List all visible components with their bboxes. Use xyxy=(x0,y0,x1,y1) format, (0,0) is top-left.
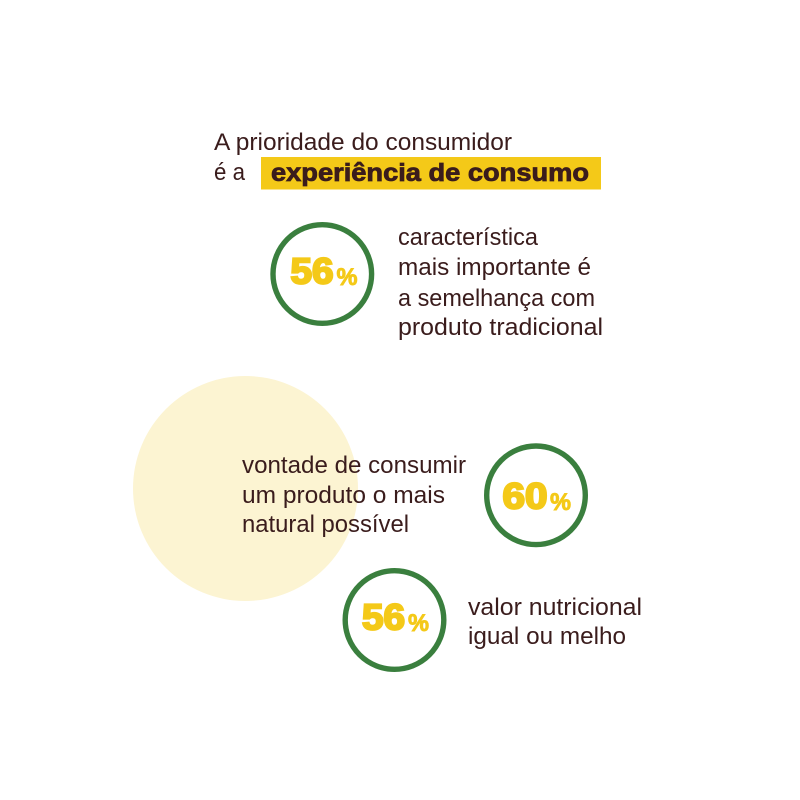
stat 2: 60% natural xyxy=(242,446,585,545)
title: é a xyxy=(214,159,246,186)
stat 1: 56% characteristic: 56 xyxy=(290,250,334,292)
stat 2: 60% natural: um produto o mais xyxy=(242,482,445,509)
stat 1: 56% characteristic: característica xyxy=(398,224,539,251)
title: experiência de consumo xyxy=(271,159,589,187)
stat 2: 60% natural: % xyxy=(550,489,571,516)
decorative pale yellow circle xyxy=(133,376,358,601)
stat 3: 56% nutritional value xyxy=(345,571,642,669)
stat 1: 56% characteristic xyxy=(273,224,603,341)
stat 3: 56% nutritional value: valor nutricional xyxy=(468,594,642,621)
title: A prioridade do consumidor xyxy=(214,129,512,156)
stat 1: 56% characteristic: mais importante é xyxy=(398,254,591,281)
stat 1: 56% characteristic: a semelhança com xyxy=(398,285,595,312)
stat 3: 56% nutritional value: 56 xyxy=(362,596,405,638)
stat 3: 56% nutritional value: % xyxy=(408,610,429,637)
stat 3: 56% nutritional value: igual ou melho xyxy=(468,623,626,650)
stat 2: 60% natural: natural possível xyxy=(242,511,409,538)
stat 1: 56% characteristic: produto tradicional xyxy=(398,314,603,341)
title xyxy=(214,129,601,190)
stat 2: 60% natural: vontade de consumir xyxy=(242,452,466,479)
stat 2: 60% natural: 60 xyxy=(502,476,548,516)
stat 1: 56% characteristic: % xyxy=(336,264,358,291)
